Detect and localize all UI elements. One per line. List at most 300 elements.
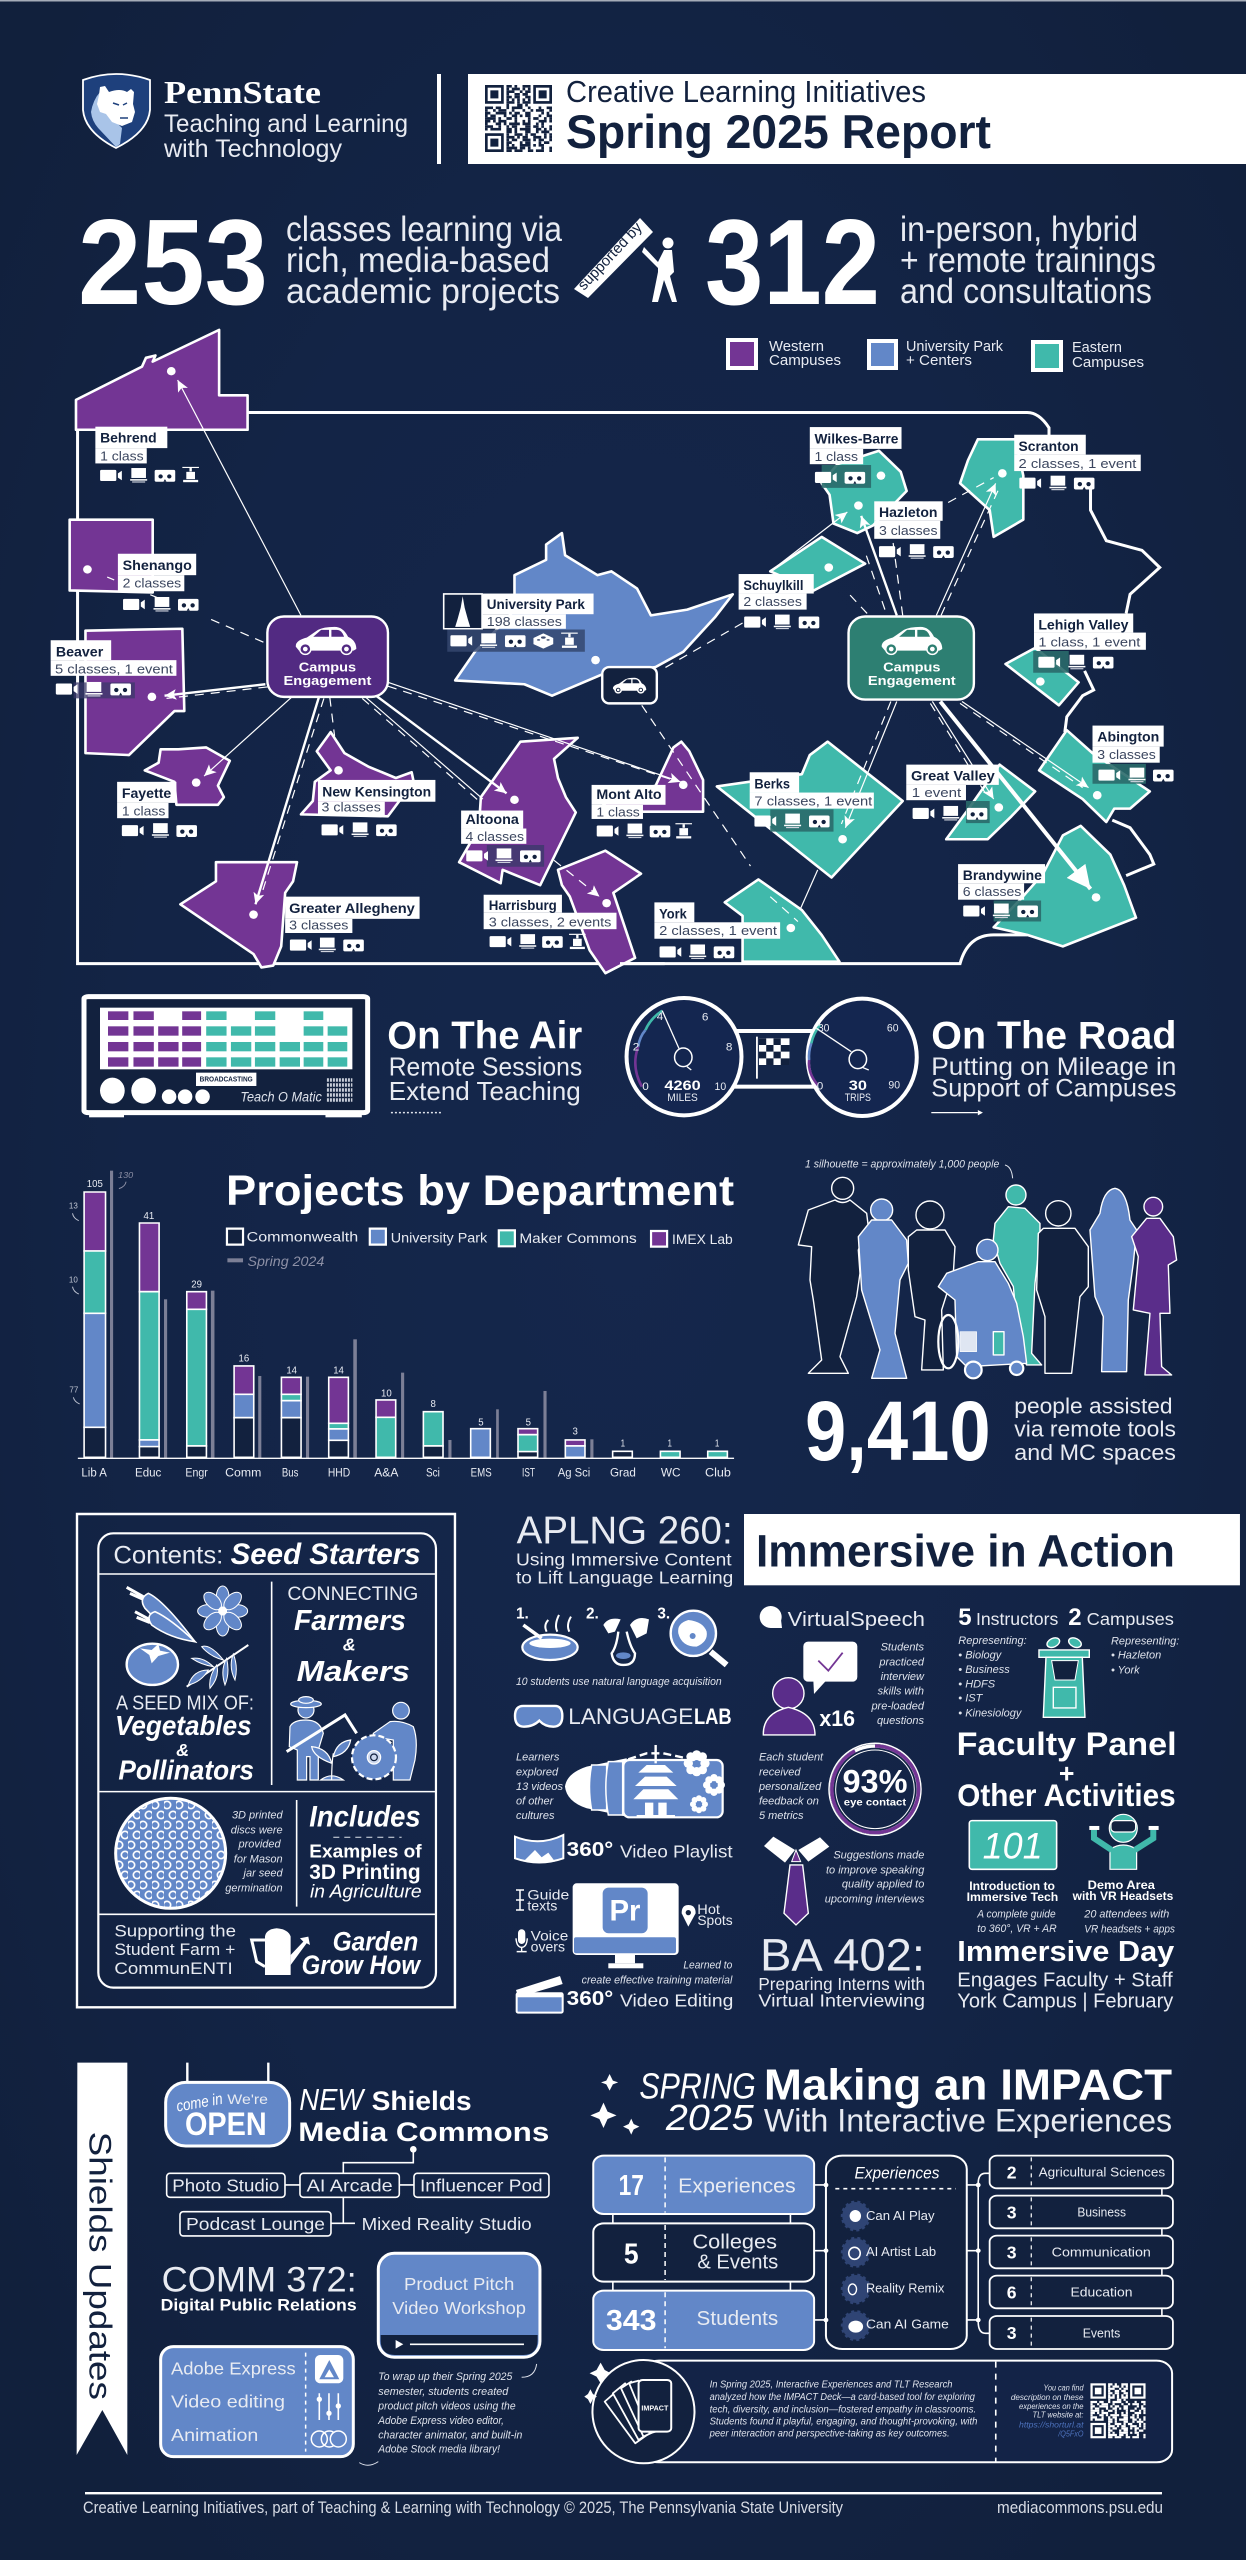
panel: experiences list: Can AI Game [866,2318,949,2332]
stat: 253 classes: academic projects [286,272,560,311]
text: seed mix: & [176,1740,189,1760]
label: Wilkes-Barre [810,427,902,488]
note: spring 2025 student videos: Adobe Stock media library! [377,2444,500,2456]
heading: Projects by Department [226,1166,734,1214]
heading: faculty panel [957,1726,1177,1813]
stats: instructors and campuses: 5 [958,1604,972,1631]
x axis labels: Sci [426,1466,440,1480]
icon: podium [1039,1636,1089,1717]
note: 3D printed discs: discs were [231,1824,283,1836]
icon: carrots [127,1587,195,1642]
icon: 101 badge: 101 [983,1824,1043,1866]
label: Hazleton: 3 classes [879,523,938,538]
logo: Language Lab: LAB [694,1704,732,1729]
text: demo area [1072,1878,1175,1936]
icon: monitor with Premiere [573,1883,679,1968]
panel: adobe express skills: Video editing [171,2392,285,2412]
stat: 9,410 people: people assisted [1014,1393,1173,1418]
icon: radio: Teach O Matic [240,1089,322,1105]
stat: 312 trainings: in-person, hybrid [900,210,1138,249]
panel: experiences list: AI Artist Lab [866,2245,936,2260]
bar value labels: 3 [572,1425,578,1437]
stat box: 343 students [593,2291,814,2350]
icon: radio: BROADCASTING [200,1075,253,1083]
gauge: miles: MILES [667,1091,698,1103]
title banner [468,74,1246,164]
label: Wilkes-Barre: Wilkes-Barre [815,432,899,446]
label: Schuylkill [739,574,819,629]
diagram: media commons spaces: Mixed Reality Studio [362,2214,532,2234]
silhouette note: 1 silhouette = approximately 1,000 people [805,1159,999,1171]
note: practiced questions: skills with [878,1686,924,1698]
stats: instructors and campuses: Campuses [1087,1609,1174,1629]
text: website note: You can find [1044,2383,1084,2392]
feature: 360 video editing: 360° [567,1987,613,2010]
x axis labels: IST [522,1466,535,1480]
header: Penn State logo: Teaching and Learning [164,110,408,138]
icon: 101 badge [969,1821,1057,1869]
text: study summary: analyzed how the IMPACT Deck—a card-based tool for exploring [710,2392,976,2403]
feature labels: guide texts and voice overs [516,1886,570,1955]
icon: numbered cooking steps [516,1605,727,1665]
panel: adobe express skills: Animation [171,2425,258,2445]
heading: on the road [931,1014,1176,1115]
stats: instructors and campuses [958,1604,1174,1631]
label: Schuylkill: Schuylkill [743,578,803,593]
panel: on the air and on the road: Remote Sessions [389,1053,582,1082]
heading: immersive day [957,1936,1174,2012]
text: connecting farmers and makers: & [343,1635,356,1655]
note: training material: Learned to [683,1959,732,1971]
icon: necktie [764,1837,829,1925]
text: supporting: Student Farm + [114,1940,235,1959]
text: study summary: Students found it playful, engaging, and thought-provoking, with [710,2416,977,2427]
text: demo area: Demo Area [1088,1878,1155,1892]
note: spring 2025 student videos: semester, students created [378,2386,509,2398]
text: intro to immersive tech: Introduction to [969,1879,1055,1893]
feature: hot spots [682,1901,733,1928]
text: supporting: Supporting the [114,1922,236,1941]
eastern campus counties [717,439,1150,962]
label: Abington: 3 classes [1097,747,1156,762]
bar value labels: 1 [621,1437,625,1449]
label: Behrend [95,427,199,483]
note: natural language acquisition: 10 students use natural language acquisition [516,1676,722,1688]
gauge: miles: 4 [657,1010,663,1022]
gauge: miles: 4260 [664,1078,701,1094]
label: Abington: Abington [1097,730,1159,745]
text: demo area: VR headsets + apps [1084,1924,1175,1936]
label: Greater Allegheny [285,897,420,952]
heading: new shields media commons: Media Commons [298,2117,549,2147]
gauge: trips: TRIPS [845,1091,871,1103]
heading: immersive day: York Campus | February [957,1990,1173,2012]
text: intro to immersive tech [967,1879,1058,1935]
heading: new shields media commons [298,2083,549,2147]
campus engagement hub east: Campus [883,660,940,675]
label: Shenango [118,554,199,612]
label: Hazleton [874,501,954,559]
panel: projects by department [69,1166,734,1480]
bar value labels: 10 [381,1387,392,1399]
chart legend: University Park [391,1230,488,1246]
stat box: 343 students: Students [697,2306,778,2329]
x axis labels: Educ [135,1466,161,1480]
bar value labels: 16 [239,1352,249,1364]
icon: sparkles [590,2074,639,2135]
feature labels: guide texts and voice overs: overs [531,1939,565,1955]
icon: VR viewer with pagoda [565,1745,725,1817]
icon: video player workshop [378,2253,540,2357]
note: practiced questions: Students [881,1642,924,1654]
chart legend: Commonwealth [247,1229,358,1245]
heading: faculty panel: + [1059,1758,1074,1788]
VirtualSpeech header: VirtualSpeech [788,1609,925,1631]
text: seed mix [115,1692,254,1785]
list: colleges and events: 2 [1007,2163,1017,2183]
heading: making an impact: SPRING [639,2066,756,2106]
label: Brandywine: Brandywine [963,868,1042,883]
label: Shenango: Shenango [123,558,192,573]
bar value labels: 5 [526,1416,531,1428]
text: intro to immersive tech: to 360°, VR + AR [977,1923,1057,1935]
note: 13 videos: Learners [516,1752,560,1764]
label: Harrisburg: Harrisburg [489,898,557,913]
stat box: 5 colleges and events [593,2223,814,2282]
gauge: miles: 6 [702,1011,708,1023]
note: personalized feedback: feedback on [759,1795,819,1807]
icon: watering can [252,1928,310,1975]
header: Penn State logo [83,74,408,163]
state outline east [620,413,1160,964]
panel: shields updates [77,2063,549,2465]
diagram: media commons spaces: Photo Studio [172,2176,279,2196]
label: Harrisburg: 3 classes, 2 events [489,915,612,929]
x axis labels: Club [705,1466,731,1480]
note: spring 2025 student videos: character animator, and built-in [378,2429,522,2441]
footer: mediacommons.psu.edu [997,2498,1163,2517]
chart: 93 percent eye contact ring: eye contact [844,1798,907,1809]
gauge: trips: 30 [818,1022,829,1034]
stat: 9,410 people: and MC spaces [1014,1440,1176,1465]
text: demo area: 20 attendees with [1083,1909,1169,1921]
label: Greater Allegheny: Greater Allegheny [289,901,415,916]
panel: seed starters [77,1514,455,2007]
campus engagement hub west [267,617,388,697]
note: personalized feedback: 5 metrics [759,1810,804,1822]
feature: 360 video playlist [515,1835,733,1862]
text: connecting farmers and makers [287,1584,418,1688]
header: Penn State logo: with Technology [163,135,342,163]
stat: 312 trainings: + remote trainings [900,241,1156,280]
heading: faculty panel: Other Activities [957,1778,1176,1813]
list: colleges and events: Business [1077,2206,1126,2220]
note: training material [582,1959,733,1986]
heading: immersive day: Engages Faculty + Staff [957,1970,1173,1992]
map legend: Campuses [769,352,841,369]
text: study summary: tech, diversity, and inclusion—fostered empathy in classrooms. [710,2404,976,2415]
icon: Old Main tower [444,594,482,629]
note: spring 2025 student videos: product pitch videos using the [377,2400,516,2412]
text: connecting farmers and makers: Farmers [294,1605,406,1637]
heading: APLNG 260: APLNG 260: [517,1508,733,1552]
feature: 360 video editing: Video Editing [620,1991,733,2011]
text: website note: description on these [1011,2393,1084,2402]
label: York: York [659,907,687,921]
list: departments: • IST [958,1693,984,1705]
icon: IMPACT cards: IMPACT [641,2404,668,2412]
icon: radio [84,997,368,1117]
x axis labels: A&A [374,1466,399,1480]
bar value labels: 1 [668,1437,672,1449]
note: practiced questions: interview [881,1671,925,1683]
feature labels: guide texts and voice overs: Voice [531,1928,569,1944]
bar chart: projects stacked bars [84,1192,727,1457]
stat box: 17 experiences: 17 [619,2169,644,2201]
label: Behrend: 1 class [100,449,144,463]
text: garden grow how: Grow How [302,1950,422,1980]
list: colleges and events [990,2156,1173,2349]
label: Mont Alto: 1 class [596,804,640,819]
text: study summary [709,2380,977,2439]
x axis labels: Grad [610,1466,636,1480]
bar value labels: 14 [286,1364,297,1376]
label: Greater Allegheny: 3 classes [289,918,349,933]
panel: APLNG 260 [515,1508,733,2013]
icon: monitor with Premiere: Pr [609,1895,640,1928]
heading: making an impact: Making an IMPACT [764,2061,1172,2109]
bar value labels [87,1178,719,1449]
label: University Park [444,594,594,652]
label: Scranton: Scranton [1019,439,1079,454]
label: York [654,902,780,959]
note: suggestions [825,1850,925,1905]
feature: hot spots: Spots [697,1912,733,1928]
heading: COMM 372: Digital Public Relations [161,2296,357,2315]
note: 3D printed discs [225,1809,284,1895]
label: Fayette: 1 class [122,804,166,818]
list: colleges and events: Agricultural Sciences [1039,2166,1165,2180]
logo: Language Lab: LANGUAGE [568,1704,693,1729]
x axis labels: Lib A [81,1466,107,1480]
note: training material: create effective training material [582,1974,733,1986]
label: Berks: 7 classes, 1 event [754,794,873,809]
feature: hot spots: Hot [697,1901,720,1917]
text: intro to immersive tech: A complete guide [976,1909,1056,1921]
label: Beaver: Beaver [56,645,104,659]
icon: video player workshop: Video Workshop [392,2298,526,2318]
heading: APLNG 260: Using Immersive Content [516,1549,732,1569]
note: suggestions: Suggestions made [833,1850,924,1862]
heading: APLNG 260 [516,1508,733,1587]
x axis labels: Bus [282,1466,298,1480]
heading: COMM 372: COMM 372: [162,2261,357,2300]
heading: contents: Seed Starters [231,1538,421,1571]
bar callouts [69,1171,134,1404]
label: Beaver: 5 classes, 1 event [55,662,173,676]
icon: numbered cooking steps: 2. [586,1605,599,1622]
label: Mont Alto [592,785,692,838]
label: Hazleton: Hazleton [879,505,938,520]
label: Altoona: Altoona [465,812,519,827]
note: 13 videos: 13 videos [516,1781,564,1793]
gauge: trips [808,999,917,1116]
label: Berks [750,772,874,832]
chart: 93 percent eye contact ring: 93% [842,1763,907,1800]
map legend: Campuses [1072,354,1144,371]
icon: student speech bubble: x16 [819,1706,855,1731]
text: website note: experiences on the [1019,2402,1084,2411]
list: departments: • HDFS [958,1678,996,1690]
car marker [602,667,657,703]
gauge: miles: 0 [642,1080,649,1092]
label: Lehigh Valley: 1 class, 1 event [1038,635,1141,650]
text: demo area: with VR Headsets [1072,1889,1174,1903]
icon: QR code [1090,2383,1146,2438]
note: suggestions: quality applied to [842,1879,924,1891]
label: York: 2 classes, 1 event [659,923,777,938]
label: Altoona [461,811,544,867]
icon: numbered cooking steps: 1. [516,1605,529,1622]
bar value labels: 8 [431,1398,436,1410]
title banner: Spring 2025 Report [566,105,991,158]
heading: BA 402: Preparing Interns with [758,1974,925,1994]
stat: 253 classes [78,194,562,330]
icon: tomato [127,1644,178,1685]
text: seed mix: Vegetables [115,1710,252,1741]
list: campuses [1111,1635,1179,1676]
list: campuses: Representing: [1111,1635,1179,1647]
ribbon: shields updates [77,2063,127,2455]
campus engagement hub west: Engagement [284,673,372,688]
text: website note [1011,2383,1084,2438]
heading: BA 402: Virtual Interviewing [758,1991,925,2011]
stats: instructors and campuses: Instructors [976,1609,1058,1629]
note: personalized feedback: personalized [758,1781,822,1793]
icon: IMPACT cards [584,2360,695,2463]
label: Behrend: Behrend [100,431,157,445]
bar callouts: 130 [118,1171,134,1181]
feature: 360 video playlist: Video Playlist [620,1841,733,1861]
heading: contents [113,1538,421,1571]
icon: farmer and maker figures [287,1697,416,1780]
stat: 9,410 people [805,1384,1176,1478]
label: Berks: Berks [754,777,790,792]
x axis labels: EMS [471,1466,492,1480]
text: intro to immersive tech: Immersive Tech [967,1890,1058,1904]
note: personalized feedback: received [759,1766,801,1778]
panel: IMPACT deck study [584,2360,1172,2463]
text: seed mix: Pollinators [118,1754,254,1785]
x axis labels: Comm [225,1466,261,1480]
note: 13 videos [516,1752,564,1822]
bar value labels: 5 [478,1416,484,1428]
panel: on the air and on the road: On The Air [387,1014,582,1057]
text: garden grow how: Garden [333,1927,418,1957]
note: suggestions: to improve speaking [826,1864,925,1876]
state outline west [78,413,665,964]
heading: making an impact [639,2061,1172,2139]
panel: experiences list [826,2156,967,2349]
label: New Kensington: 3 classes [322,800,381,814]
text: includes 3D printing: 3D Printing [309,1861,421,1884]
list: campuses: • Hazleton [1111,1650,1161,1662]
campus engagement hub east: Engagement [868,673,957,688]
icon: QR code [485,85,552,152]
icon: person with VR headset [1089,1814,1159,1869]
label: New Kensington [318,780,435,837]
x axis labels: WC [661,1466,680,1480]
label: University Park: 198 classes [487,614,562,629]
heading: new shields media commons: NEW [299,2083,366,2117]
feature labels: guide texts and voice overs: texts [527,1898,557,1914]
list: colleges and events: 3 [1007,2203,1017,2223]
list: departments: • Business [958,1664,1010,1676]
heading: making an impact: With Interactive Experiences [764,2103,1172,2139]
label: Wilkes-Barre: 1 class [815,449,858,464]
heading banner: Immersive in Action [756,1526,1175,1577]
diagram: media commons spaces: Podcast Lounge [186,2214,325,2234]
icon: open sign [166,2063,290,2146]
map legend: Western [769,338,824,355]
bar chart: Spring 2024 comparison [110,1171,593,1458]
label: Great Valley [906,765,999,823]
footer: Creative Learning Initiatives, part of Teaching & Learning with Technology © 2025, The Pennsylvania State University [83,2498,843,2517]
note: personalized feedback [758,1752,824,1822]
note: 3D printed discs: germination [225,1883,283,1895]
silhouettes of people [798,1177,1177,1378]
bar value labels: 1 [715,1437,719,1449]
panel: adobe express skills: Adobe Express [171,2358,296,2378]
note: spring 2025 student videos: To wrap up their Spring 2025 [378,2371,513,2383]
list: departments: Representing: [958,1635,1027,1647]
gauge: miles: 8 [726,1040,732,1053]
chart: 93 percent eye contact ring [829,1743,921,1835]
list: departments: • Biology [958,1649,1003,1661]
stat box: 5 colleges and events: 5 [624,2237,639,2270]
heading: BA 402 [758,1930,925,2011]
note: personalized feedback: Each student [759,1752,824,1764]
panel: experiences list: Experiences [855,2163,939,2182]
list: departments: • Kinesiology [958,1708,1023,1720]
icon: leafy branch [187,1645,248,1688]
gauge: trips: 60 [887,1022,899,1034]
note: spring 2025 student videos [359,2364,537,2465]
label: Great Valley: 1 event [912,785,962,800]
x axis labels: Ag Sci [558,1466,590,1480]
list: colleges and events: 3 [1007,2324,1017,2343]
text: website note: https://shorturl.at [1019,2420,1084,2429]
connector lines [613,2173,1162,2333]
text: study summary: peer interaction and perspective-taking as key outcomes. [709,2429,950,2439]
bar value labels: 41 [143,1210,154,1222]
label: Scranton [1014,435,1141,490]
connection lines from east hub [642,478,1091,922]
campus dots west [83,367,611,919]
note: practiced questions [870,1642,925,1727]
x axis labels [81,1466,731,1480]
campus engagement hub west: Campus [299,660,356,675]
note: spring 2025 student videos: Adobe Express video editor, [377,2415,504,2427]
heading: immersive day: Immersive Day [957,1936,1174,1968]
label: University Park: University Park [487,597,585,612]
panel: immersive in action [744,1514,1240,2012]
note: 3D printed discs: jar seed [242,1868,284,1880]
stat: 312 trainings: 312 [705,194,880,330]
stat box: 5 colleges and events: Colleges [692,2230,777,2253]
list: departments [958,1635,1027,1720]
list: colleges and events: Communication [1052,2246,1151,2260]
